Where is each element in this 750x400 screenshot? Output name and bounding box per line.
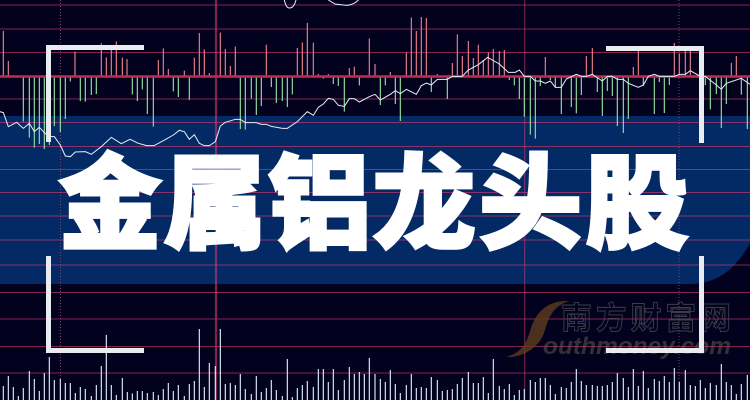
- watermark swoosh S: [506, 301, 569, 357]
- chart: price line: [0, 0, 750, 157]
- chart: red and green bars, left half: [3, 23, 369, 149]
- bracket: bottom left: [48, 256, 144, 350]
- chart: volume bars, right half: [375, 359, 747, 400]
- title: 金属铝龙头股: [58, 147, 688, 262]
- watermark Chinese name: 南方财富网: [561, 301, 731, 336]
- chart: red and green bars, right half: [375, 17, 747, 139]
- chart baseline: [0, 75, 750, 78]
- chart: volume bars, left half: [3, 329, 369, 400]
- blue title band: [0, 116, 750, 284]
- watermark: southmoney logo: [506, 301, 731, 360]
- bracket: bottom right: [606, 256, 702, 350]
- bracket: top right: [606, 48, 702, 143]
- bracket: top left: [48, 48, 144, 142]
- corner brackets: [48, 48, 702, 350]
- watermark Latin name: outhmoney.com: [543, 333, 731, 360]
